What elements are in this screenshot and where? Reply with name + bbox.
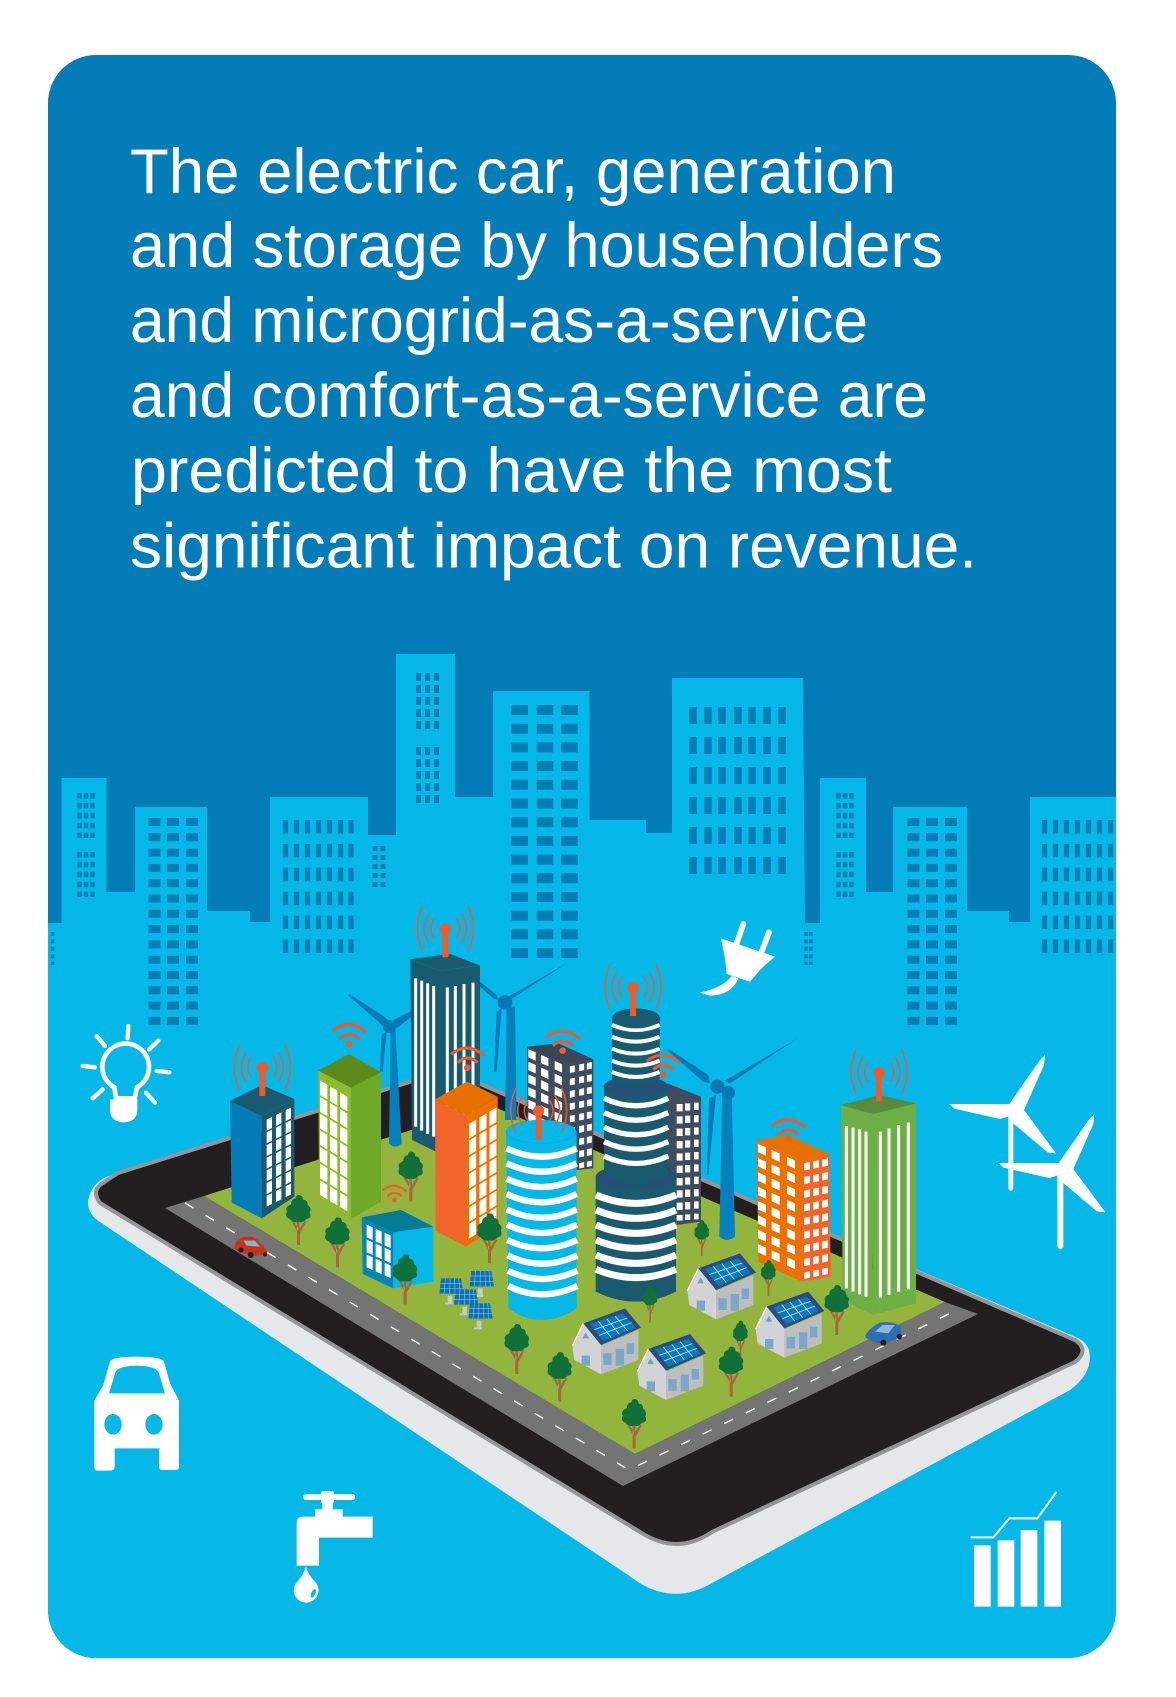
title: and comfort-as-a-service are xyxy=(130,361,928,431)
road and city ground xyxy=(165,1105,978,1486)
title: The electric car, generation xyxy=(130,137,896,207)
more trees near the front of the lawn xyxy=(547,1352,646,1448)
wind turbine back left xyxy=(348,994,413,1147)
icon: light bulb xyxy=(83,1026,169,1122)
icon: growth bar chart xyxy=(971,1492,1061,1607)
green block xyxy=(318,1024,381,1219)
title: predicted to have the most xyxy=(131,436,893,506)
grey office block behind stack xyxy=(667,1083,701,1225)
icon: car xyxy=(94,1357,179,1471)
icon: water tap xyxy=(294,1491,373,1603)
orange apartment block xyxy=(757,1120,831,1282)
solar panels xyxy=(439,1271,494,1329)
red car xyxy=(234,1237,267,1258)
skyline silhouette xyxy=(48,654,1116,1658)
houses with rooftop solar xyxy=(572,1253,824,1400)
title: significant impact on revenue. xyxy=(130,512,977,582)
blue cylinder tower xyxy=(506,1088,577,1320)
navy block with antenna xyxy=(230,1044,294,1218)
tall dark tower xyxy=(410,906,480,1153)
trees xyxy=(286,1152,529,1374)
blue car xyxy=(865,1322,902,1346)
skyline windows xyxy=(52,673,1110,1025)
trees right xyxy=(643,1220,849,1397)
tiered cylinder tower xyxy=(596,964,680,1302)
city left half xyxy=(230,906,593,1374)
title: and microgrid-as-a-service xyxy=(130,286,868,356)
green striped tower xyxy=(841,1049,916,1315)
wind turbine right xyxy=(667,1038,798,1240)
wind turbine back centre xyxy=(480,963,567,1120)
grey office block xyxy=(527,1031,593,1172)
small blue cube building xyxy=(362,1186,433,1288)
title: and storage by householders xyxy=(130,211,943,281)
icon: plug xyxy=(700,924,775,996)
orange block xyxy=(435,1048,498,1247)
icon: wind turbines xyxy=(949,1055,1105,1249)
tablet device xyxy=(88,1070,1090,1594)
city right half xyxy=(572,964,916,1400)
